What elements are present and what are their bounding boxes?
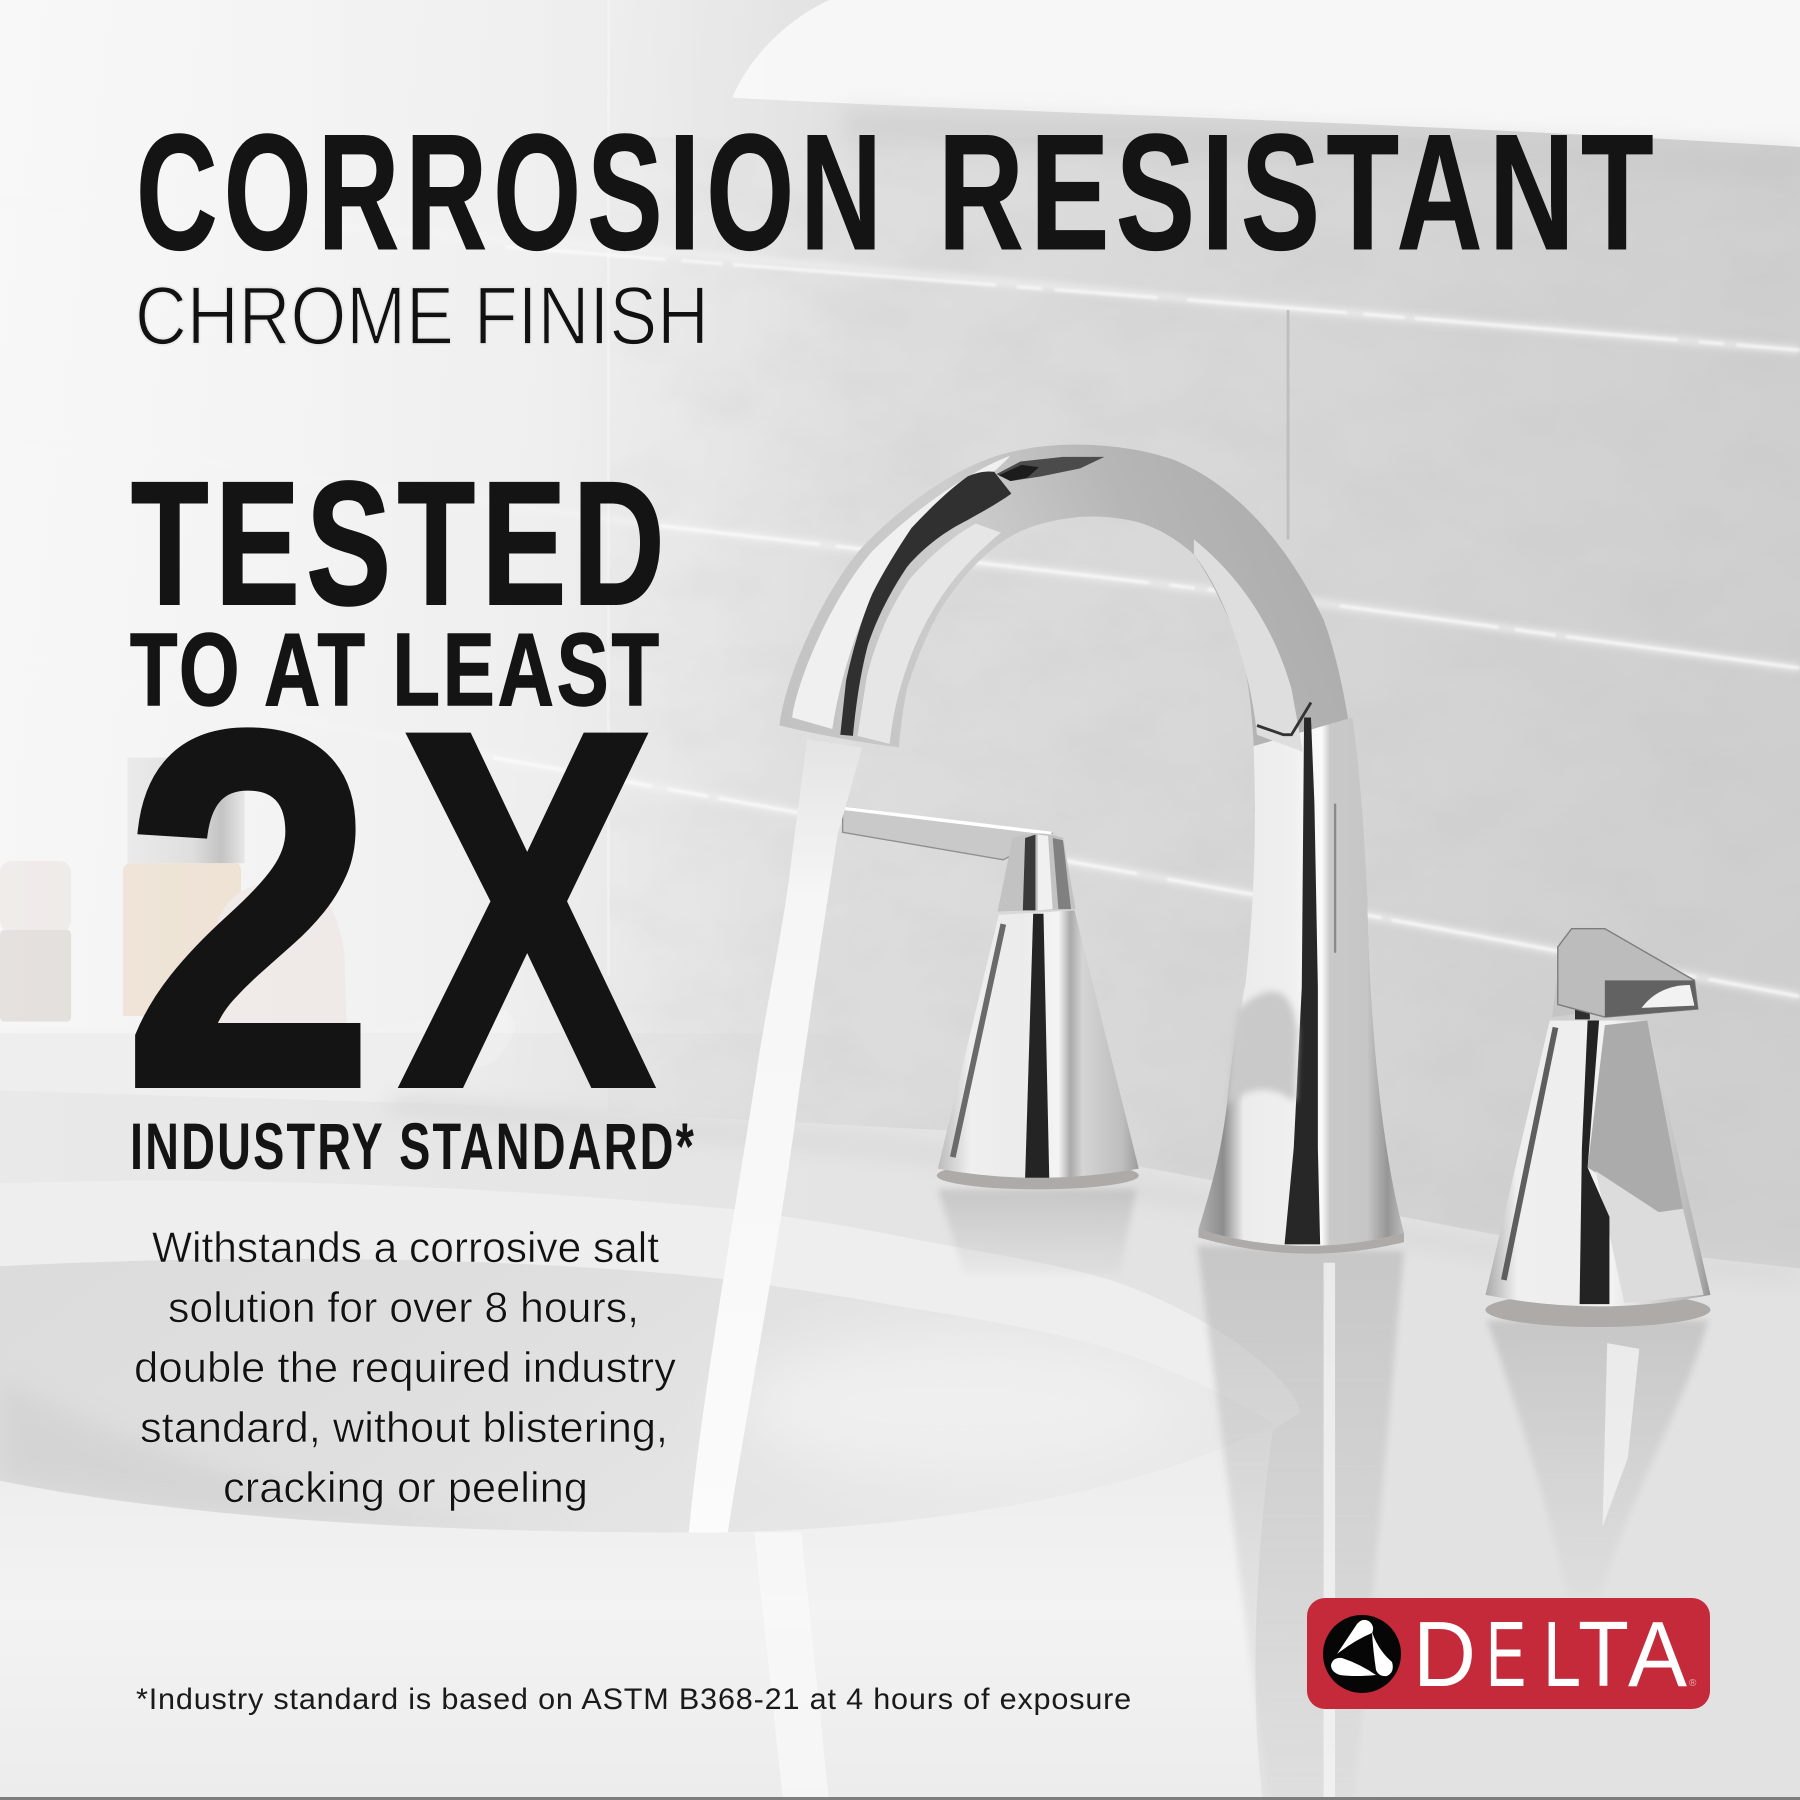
counter reflections	[938, 1189, 1708, 1800]
wordmark: A	[1628, 1602, 1687, 1706]
body description	[134, 1224, 676, 1512]
body description: cracking or peeling	[223, 1464, 588, 1512]
wordmark: D	[1413, 1602, 1476, 1706]
claim block	[123, 446, 696, 1192]
main faucet spout	[779, 445, 1404, 1254]
upper white shelf	[732, 0, 1800, 147]
bottom edge line	[0, 1797, 1800, 1800]
running water	[689, 739, 862, 1800]
body description: double the required industry	[134, 1344, 676, 1392]
headline: to at least: TO AT LEAST	[130, 612, 662, 727]
delta logo	[1307, 1598, 1710, 1709]
sink rim	[0, 1181, 1301, 1429]
left handle	[843, 807, 1139, 1189]
body description: Withstands a corrosive salt	[152, 1224, 659, 1272]
vanity items on the left	[0, 758, 514, 1102]
footnote: *Industry standard is based on ASTM B368-21 at 4 hours of exposure	[136, 1683, 1132, 1716]
headline: industry standard: INDUSTRY STANDARD*	[130, 1109, 696, 1183]
wordmark: T	[1578, 1602, 1629, 1706]
sink front	[0, 1423, 1274, 1800]
headline: 2X: 2	[123, 628, 375, 1192]
body description: standard, without blistering,	[140, 1404, 668, 1452]
subtitle: chrome finish: CHROME FINISH	[135, 269, 709, 362]
tile grout lines	[0, 0, 1800, 996]
light wash over the left of the wall	[0, 0, 872, 1033]
icon: delta emblem	[1323, 1615, 1401, 1693]
right handle	[1485, 929, 1710, 1327]
headline: 2X: X	[400, 628, 656, 1192]
sink bowl	[0, 1259, 1274, 1533]
wall mottled texture	[608, 138, 1800, 1228]
wordmark: L	[1543, 1602, 1581, 1706]
wordmark: E	[1486, 1602, 1526, 1706]
registered mark: ®	[1689, 1678, 1697, 1689]
countertop	[0, 1091, 1800, 1800]
body description: solution for over 8 hours,	[168, 1284, 639, 1332]
title: corrosion resistant: CORROSION	[136, 100, 888, 284]
headline: tested: TESTED	[131, 446, 671, 642]
